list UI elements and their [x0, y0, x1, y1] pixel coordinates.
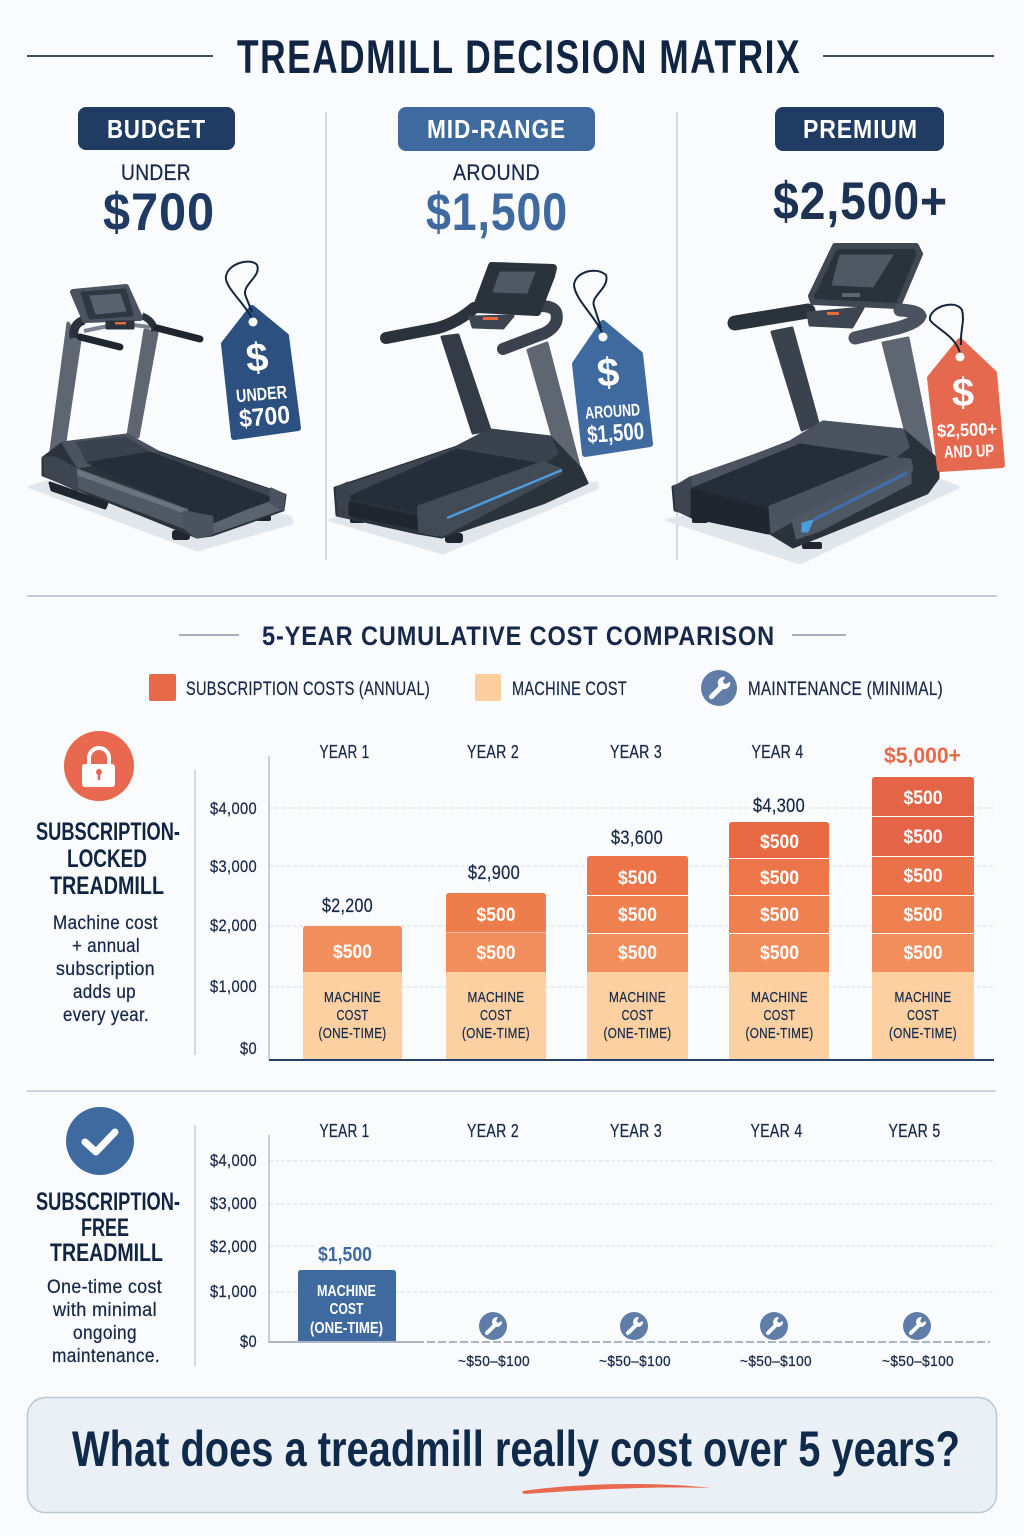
bar chart: subscription-free cumulative cost [210, 1121, 994, 1370]
panel: subscription-free label [36, 1107, 180, 1367]
bar: year 3: $500 [618, 905, 657, 926]
legend item: subscription costs [149, 674, 430, 701]
price tag: $2,500+ and up: AND UP [944, 441, 994, 462]
bar: year 5: MACHINE [894, 989, 952, 1006]
bar: year 5: $500 [904, 827, 942, 848]
bar: year 5: $500 [904, 866, 942, 887]
price tag: under $700: $ [244, 335, 270, 381]
y axis labels: $2,000 [210, 916, 257, 935]
bar: year 2: $500 [476, 943, 516, 964]
bar: year 4: $500 [760, 905, 799, 926]
year labels: YEAR 1 [320, 742, 370, 762]
bar: year 5: COST [907, 1007, 939, 1024]
y axis labels: $2,000 [210, 1237, 257, 1256]
bar: year 1: $500 [333, 942, 372, 963]
description: subscription-locked: adds up [73, 982, 136, 1003]
icon: check mark [66, 1107, 134, 1175]
y axis labels [210, 1151, 257, 1351]
maintenance: year 2: ~$50–$100 [458, 1353, 530, 1370]
heading: subscription-locked treadmill: SUBSCRIPTION- [36, 818, 180, 846]
bar: year 2: $2,900 [468, 863, 520, 884]
price tag: around $1,500: $ [595, 350, 621, 396]
bar: year 3: COST [622, 1007, 654, 1024]
icon: padlock [64, 731, 134, 801]
heading: subscription-locked treadmill: TREADMILL [50, 872, 164, 900]
bar: year 3: $3,600 [611, 828, 663, 849]
price tag: around $1,500: $1,500 [586, 418, 645, 449]
bar: year 4: $500 [760, 943, 799, 964]
y axis labels: $0 [240, 1332, 257, 1351]
bar: year 1: $2,200 [322, 896, 373, 917]
maintenance: year 5: ~$50–$100 [882, 1353, 954, 1370]
bar: year 1: COST [336, 1007, 368, 1024]
year labels: YEAR 5 [888, 1121, 940, 1141]
bar: year 2: MACHINE [468, 989, 524, 1006]
maintenance: year 2 [458, 1312, 530, 1370]
bar: year 2: (ONE-TIME) [462, 1025, 530, 1042]
bar: year 4: $500 [760, 832, 799, 853]
callout: what does a treadmill really cost [28, 1398, 996, 1512]
bar: year 3: (ONE-TIME) [604, 1025, 672, 1042]
legend [149, 670, 943, 706]
description: subscription-free: with minimal [52, 1300, 157, 1321]
y axis labels: $3,000 [210, 857, 257, 876]
bar: year 4 [729, 794, 829, 1060]
panel: premium tier [667, 107, 1002, 563]
y axis labels: $3,000 [210, 1194, 257, 1213]
description: subscription-locked: + annual [72, 936, 140, 957]
y axis labels: $1,000 [210, 977, 257, 996]
bar: year 3 [587, 828, 688, 1060]
y axis labels: $0 [240, 1039, 257, 1058]
bar: year 1: (ONE-TIME) [318, 1025, 386, 1042]
price tag: $2,500+ and up [930, 305, 1002, 469]
panel: budget tier [30, 107, 298, 550]
heading: subscription-locked treadmill: LOCKED [67, 845, 147, 873]
bar: year 2: COST [480, 1007, 512, 1024]
bar: year 5: $500 [904, 905, 942, 926]
heading: subscription-free treadmill [36, 1188, 180, 1267]
maintenance: year 3 [599, 1312, 671, 1370]
heading: subscription-free treadmill: FREE [81, 1214, 129, 1242]
y axis labels: $1,000 [210, 1282, 257, 1301]
bar: one-time machine cost [298, 1244, 396, 1342]
bar: year 5: $5,000+ [884, 743, 961, 768]
bar: one-time machine cost: (ONE-TIME) [310, 1320, 383, 1337]
legend item: machine cost [475, 674, 627, 701]
year labels: YEAR 3 [610, 1121, 662, 1141]
bar: year 5: $500 [904, 943, 942, 964]
bar chart: subscription-locked cumulative cost [210, 742, 994, 1060]
price tag: around $1,500: AROUND [585, 400, 641, 423]
bar: year 1: MACHINE [324, 989, 381, 1006]
year labels: YEAR 4 [750, 1121, 802, 1141]
year labels: YEAR 4 [752, 742, 804, 762]
bar: year 4: $500 [760, 868, 799, 889]
y axis labels [210, 799, 257, 1058]
price tag: under $700: UNDER [235, 382, 288, 406]
price: around $1,500: AROUND [453, 160, 540, 185]
bar: year 4: MACHINE [751, 989, 808, 1006]
description: subscription-free: ongoing [73, 1323, 137, 1344]
badge: premium [775, 107, 944, 151]
year labels: YEAR 2 [467, 1121, 519, 1141]
price: around $1,500 [426, 160, 568, 242]
bar: year 3: $500 [618, 943, 657, 964]
badge: budget: BUDGET [107, 114, 206, 144]
y axis labels: $4,000 [210, 799, 257, 818]
bar: one-time machine cost: COST [330, 1301, 364, 1318]
description: subscription-locked: subscription [56, 959, 155, 980]
bar: year 5: (ONE-TIME) [889, 1025, 957, 1042]
price: around $1,500: $1,500 [426, 183, 568, 242]
year labels [320, 742, 804, 762]
price tag: $2,500+ and up: $2,500+ [937, 419, 997, 441]
description: subscription-locked [53, 913, 158, 1026]
legend item: maintenance [701, 670, 943, 706]
year labels: YEAR 1 [320, 1121, 370, 1141]
price tag: under $700: $700 [238, 401, 291, 433]
badge: premium: PREMIUM [803, 114, 918, 144]
description: subscription-locked: every year. [63, 1005, 149, 1026]
description: subscription-free: maintenance. [52, 1346, 160, 1367]
description: subscription-locked: Machine cost [53, 913, 158, 934]
maintenance: year 4 [740, 1312, 812, 1370]
bar: year 4: $4,300 [753, 796, 805, 817]
legend item: maintenance: MAINTENANCE (MINIMAL) [748, 679, 943, 700]
bar: year 5 [872, 743, 974, 1060]
price: under $700: $700 [103, 183, 215, 242]
heading: subscription-free treadmill: TREADMILL [50, 1239, 163, 1267]
description: subscription-free [47, 1277, 162, 1367]
heading: 5-year cumulative cost comparison: 5-YEAR CUMULATIVE COST COMPARISON [262, 621, 775, 651]
year labels: YEAR 2 [467, 742, 519, 762]
badge: budget [78, 107, 235, 150]
description: subscription-free: One-time cost [47, 1277, 162, 1298]
y axis labels: $4,000 [210, 1151, 257, 1170]
title: TREADMILL DECISION MATRIX [237, 30, 801, 83]
year labels: YEAR 3 [610, 742, 662, 762]
bar: year 3: $500 [618, 868, 657, 889]
bar: one-time machine cost: $1,500 [318, 1244, 372, 1266]
badge: mid-range: MID-RANGE [427, 114, 566, 144]
illustration: budget treadmill [30, 287, 292, 550]
year labels [320, 1121, 940, 1141]
bar: year 1 [303, 896, 402, 1060]
bar: year 5: $500 [904, 788, 942, 809]
legend item: subscription costs: SUBSCRIPTION COSTS (ANNUAL) [186, 679, 430, 700]
price: $2,500+: $2,500+ [773, 172, 948, 231]
bar: year 4: (ONE-TIME) [746, 1025, 814, 1042]
price: under $700: UNDER [121, 160, 191, 185]
bar: year 3: MACHINE [609, 989, 666, 1006]
panel: mid-range tier [330, 107, 650, 553]
illustration: premium treadmill [667, 246, 958, 563]
maintenance: year 3: ~$50–$100 [599, 1353, 671, 1370]
bar: year 2: $500 [476, 905, 516, 926]
bar: year 4: COST [764, 1007, 796, 1024]
legend item: machine cost: MACHINE COST [512, 679, 627, 700]
maintenance: year 5 [882, 1312, 954, 1370]
heading: subscription-locked treadmill [36, 818, 180, 900]
illustration: mid-range treadmill [330, 266, 597, 553]
price tag: around $1,500 [574, 271, 650, 454]
bar: year 2 [446, 863, 546, 1060]
price tag: under $700 [224, 262, 298, 437]
heading: subscription-free treadmill: SUBSCRIPTION- [36, 1188, 180, 1216]
badge: mid-range [398, 107, 595, 151]
panel: subscription-locked label [36, 731, 180, 1026]
price: under $700 [103, 160, 215, 242]
maintenance: year 4: ~$50–$100 [740, 1353, 812, 1370]
price tag: $2,500+ and up: $ [952, 371, 974, 415]
bar: one-time machine cost: MACHINE [317, 1283, 376, 1300]
